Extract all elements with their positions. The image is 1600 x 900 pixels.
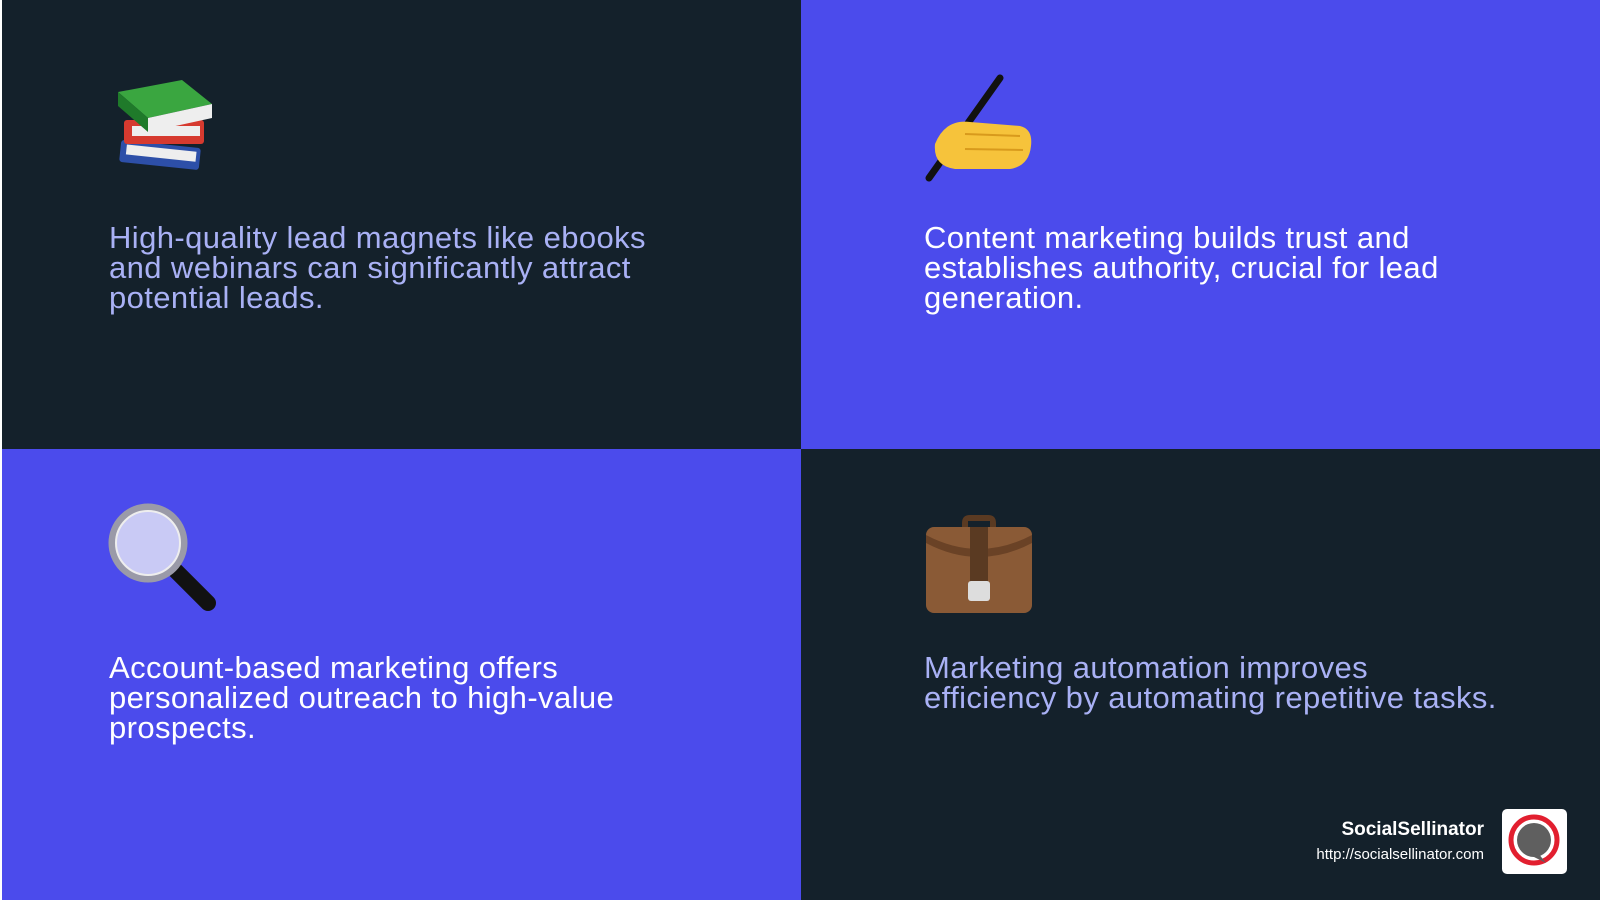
text: lead magnets: potential leads.	[109, 280, 324, 315]
text: lead magnets: High-quality lead magnets like ebooks	[109, 220, 646, 255]
text: lead magnets: and webinars can significantly attract	[109, 250, 631, 285]
logo	[1502, 809, 1567, 874]
text: account-based marketing: personalized outreach to high-value	[109, 680, 614, 715]
panel: lead magnets	[2, 0, 801, 449]
text: marketing automation	[924, 650, 1497, 715]
icon: writing hand	[926, 74, 1032, 182]
panel: marketing automation	[801, 449, 1600, 900]
text: account-based marketing: Account-based marketing offers	[109, 650, 558, 685]
icon: briefcase	[926, 515, 1032, 613]
panel: account-based marketing	[2, 449, 801, 900]
text: content marketing: generation.	[924, 280, 1084, 315]
text: content marketing: establishes authority, crucial for lead	[924, 250, 1439, 285]
text: content marketing	[924, 220, 1439, 315]
brand: SocialSellinator	[1316, 809, 1567, 874]
text: marketing automation: efficiency by automating repetitive tasks.	[924, 680, 1497, 715]
icon: books	[118, 80, 212, 170]
text: lead magnets	[109, 220, 646, 315]
panel: content marketing	[801, 0, 1600, 449]
text: account-based marketing	[109, 650, 614, 745]
text: marketing automation: Marketing automation improves	[924, 650, 1368, 685]
text: content marketing: Content marketing builds trust and	[924, 220, 1410, 255]
brand name: SocialSellinator	[1341, 819, 1484, 840]
text: account-based marketing: prospects.	[109, 710, 256, 745]
brand url: http://socialsellinator.com	[1316, 846, 1484, 863]
icon: magnifying glass	[108, 504, 216, 611]
